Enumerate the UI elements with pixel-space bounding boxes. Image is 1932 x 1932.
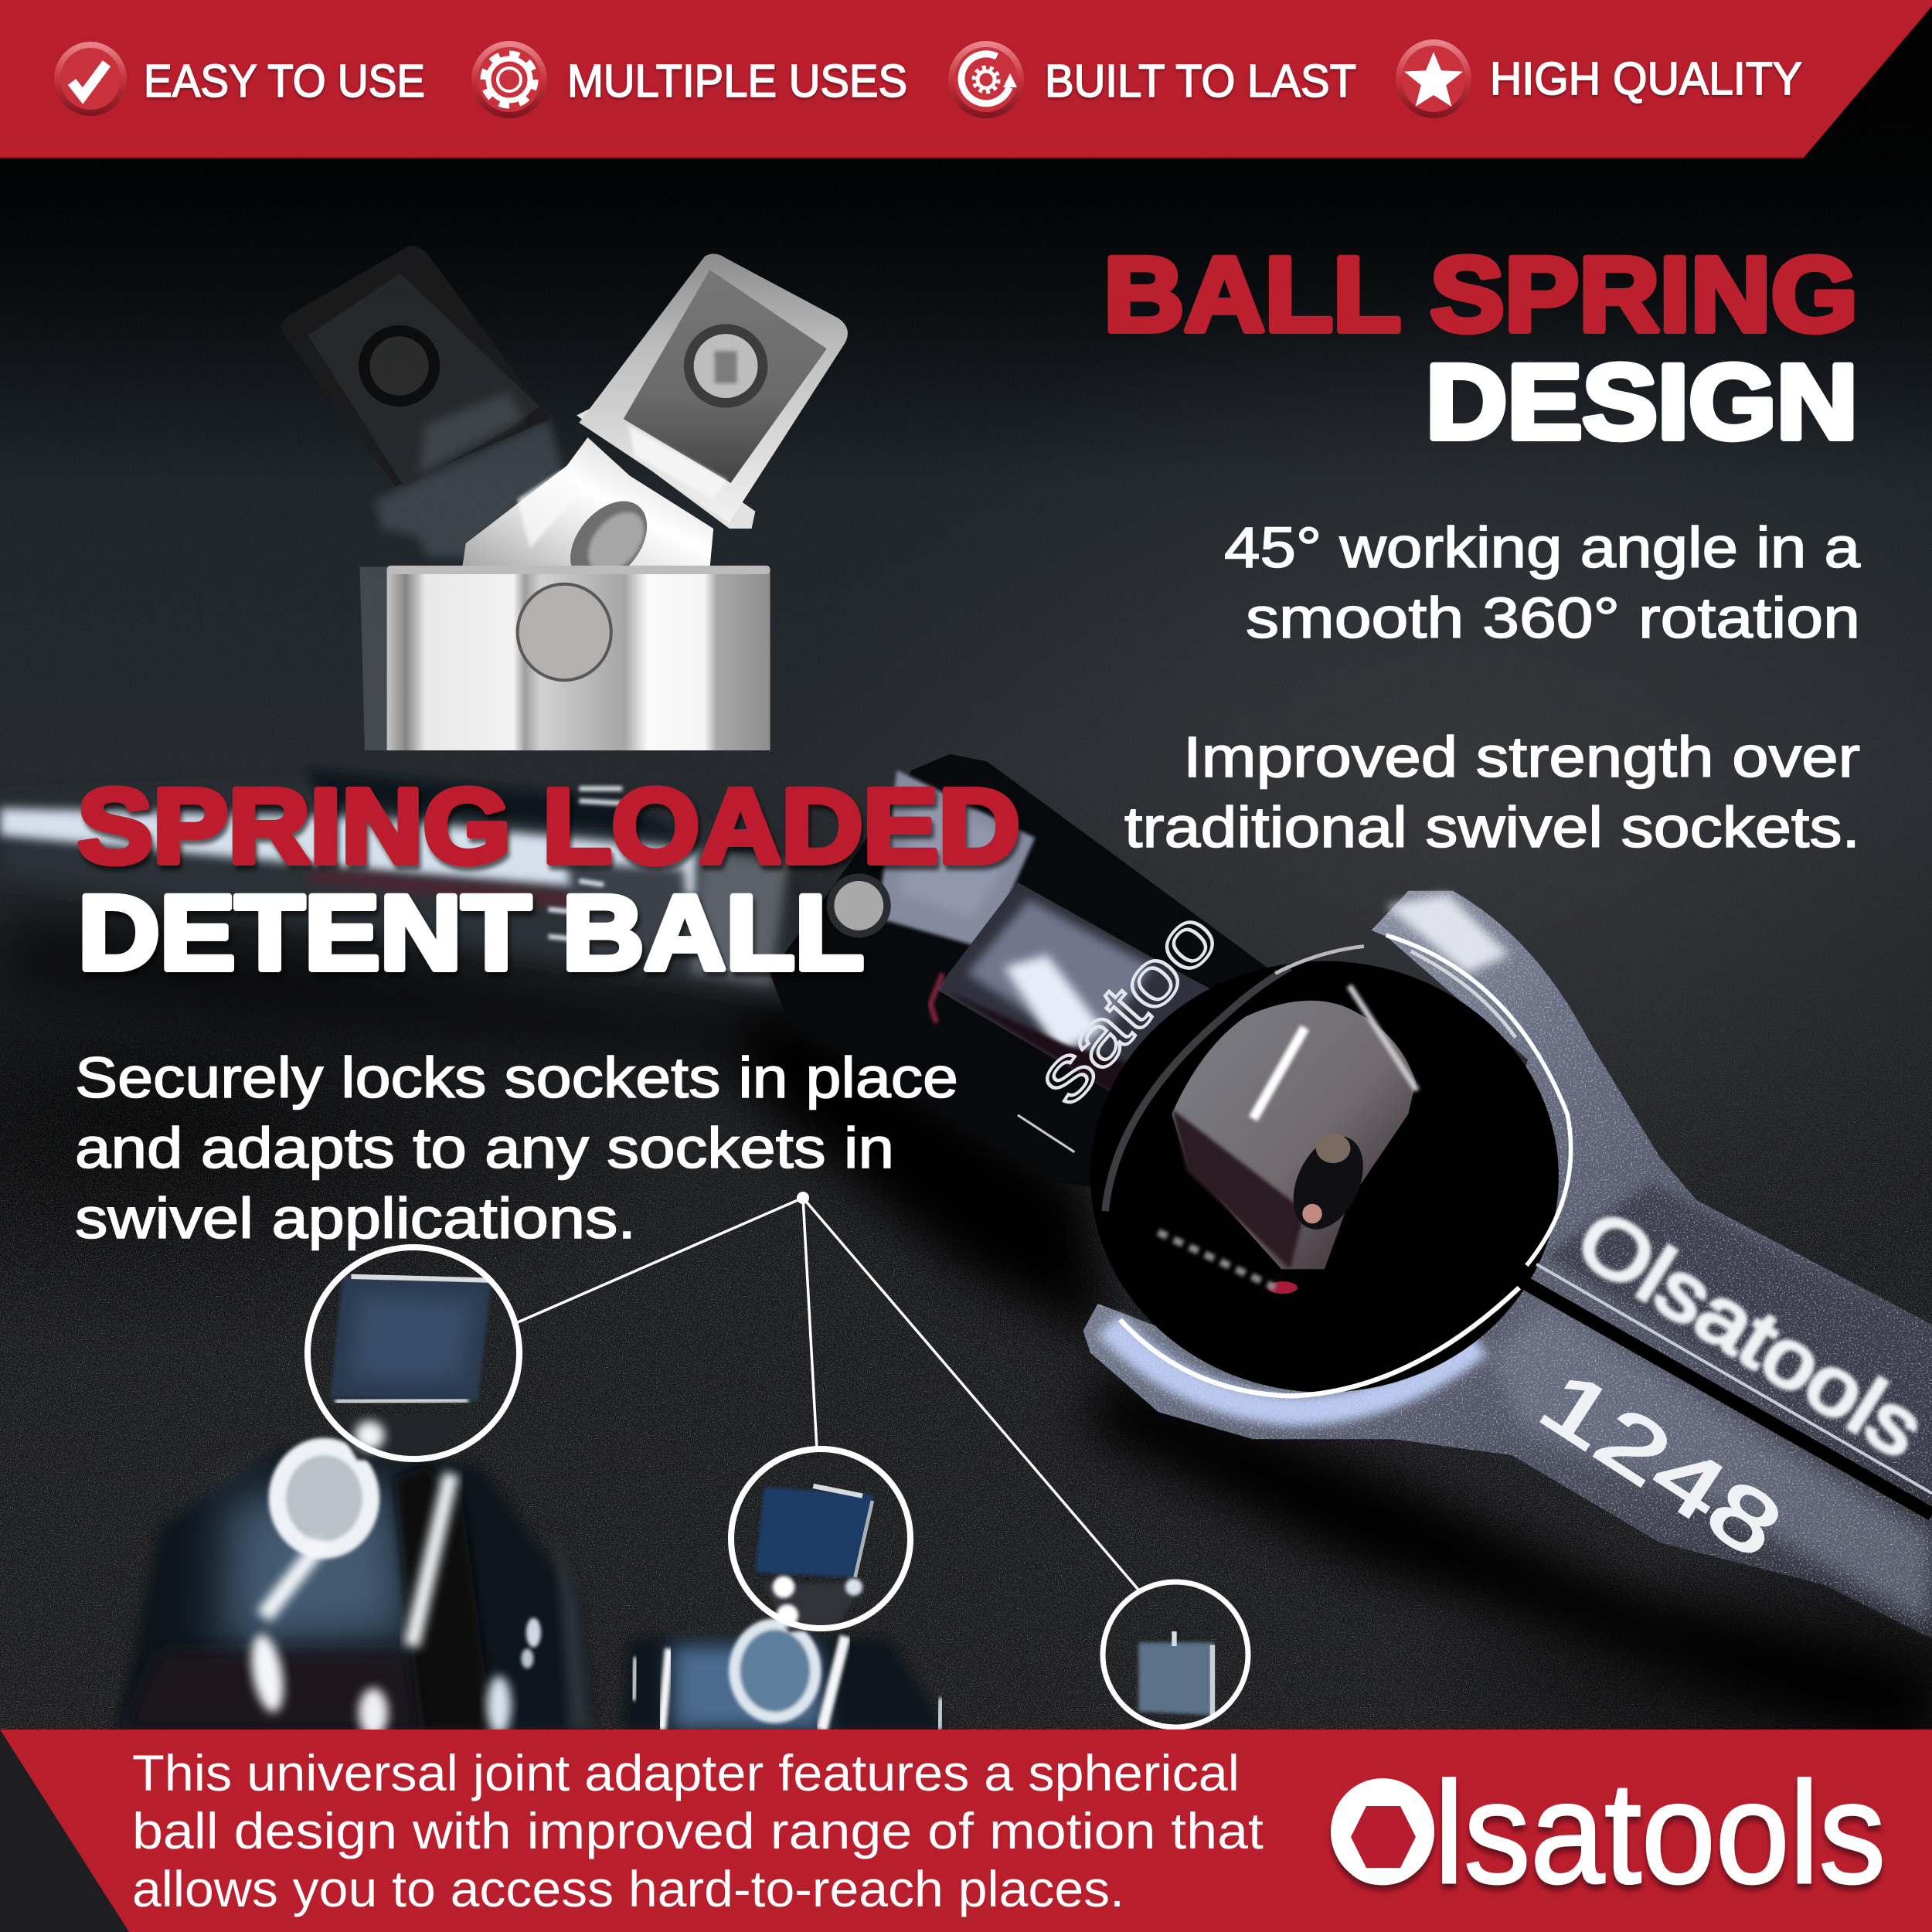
cast shadows bbox=[0, 912, 1932, 1756]
text block: ball spring benefits bbox=[1124, 515, 1861, 859]
product render: universal joint adapter bbox=[281, 246, 848, 750]
ball bearing bbox=[684, 324, 767, 408]
text block: detent ball benefits: Securely locks sockets in place bbox=[75, 1046, 958, 1110]
middle socket bbox=[622, 1486, 945, 1730]
feature: built to last: BUILT TO LAST bbox=[1045, 56, 1356, 107]
foreground sockets bbox=[117, 1275, 1213, 1737]
swivel arm bbox=[462, 253, 848, 598]
extension bar bbox=[0, 770, 788, 998]
feature: high quality bbox=[1396, 39, 1802, 118]
photo: extension, socket and wrench bbox=[0, 754, 1932, 1756]
wrench brand engraving: Olsatools bbox=[1562, 1192, 1932, 1475]
text block: product description bbox=[132, 1744, 1264, 1917]
text block: ball spring benefits: traditional swivel sockets. bbox=[1124, 795, 1860, 859]
left socket square drive bbox=[330, 1275, 492, 1460]
heading: spring loaded detent ball bbox=[77, 767, 1020, 992]
right socket tip bbox=[1138, 1631, 1213, 1715]
feature: built to last bbox=[948, 41, 1356, 118]
text block: ball spring benefits: smooth 360° rotation bbox=[1246, 586, 1860, 650]
logo: Olsatools: Olsatools bbox=[1331, 1752, 1886, 1913]
text block: ball spring benefits: Improved strength over bbox=[1183, 725, 1860, 789]
socket cylinder bbox=[387, 566, 770, 750]
text block: ball spring benefits: 45° working angle in a bbox=[1224, 515, 1861, 580]
text block: detent ball benefits: and adapts to any sockets in bbox=[75, 1116, 894, 1180]
text block: detent ball benefits: swivel applications. bbox=[75, 1186, 636, 1250]
text block: product description: allows you to access hard-to-reach places. bbox=[132, 1860, 1124, 1917]
icon: gear with arrow bbox=[948, 41, 1024, 118]
large left socket bbox=[117, 1447, 591, 1737]
heading: spring loaded detent ball: SPRING LOADED bbox=[77, 767, 1020, 886]
locking button bbox=[518, 584, 611, 680]
heading: ball spring design: BALL SPRING bbox=[1104, 236, 1858, 354]
wrench size number: 1248 bbox=[1524, 1352, 1799, 1577]
text block: product description: This universal joint adapter features a spherical bbox=[132, 1744, 1240, 1801]
callout: pointer lines and highlight circles bbox=[308, 1192, 1248, 1727]
heading: ball spring design: DESIGN bbox=[1426, 343, 1858, 461]
feature: easy to use bbox=[54, 42, 425, 116]
icon: star bbox=[1396, 39, 1471, 118]
ghost position of swivel arm bbox=[281, 246, 563, 750]
icon: gear bbox=[471, 41, 547, 118]
feature: high quality: HIGH QUALITY bbox=[1490, 53, 1802, 104]
wrench head and handle bbox=[1072, 875, 1932, 1663]
icon: check mark bbox=[54, 42, 127, 116]
engraved mark: satoo bbox=[1019, 893, 1234, 1120]
text block: detent ball benefits bbox=[75, 1046, 958, 1250]
socket body bbox=[770, 754, 1275, 1189]
heading: spring loaded detent ball: DETENT BALL bbox=[78, 874, 864, 992]
top banner bbox=[0, 0, 1932, 158]
ball joint bbox=[1090, 946, 1559, 1393]
heading: ball spring design bbox=[1104, 236, 1858, 461]
feature: easy to use: EASY TO USE bbox=[144, 56, 425, 107]
bottom banner bbox=[0, 1730, 1932, 1932]
detent ball bbox=[827, 873, 891, 937]
feature: multiple uses: MULTIPLE USES bbox=[567, 56, 907, 107]
text block: product description: ball design with improved range of motion that bbox=[132, 1802, 1264, 1859]
feature: multiple uses bbox=[471, 41, 907, 118]
